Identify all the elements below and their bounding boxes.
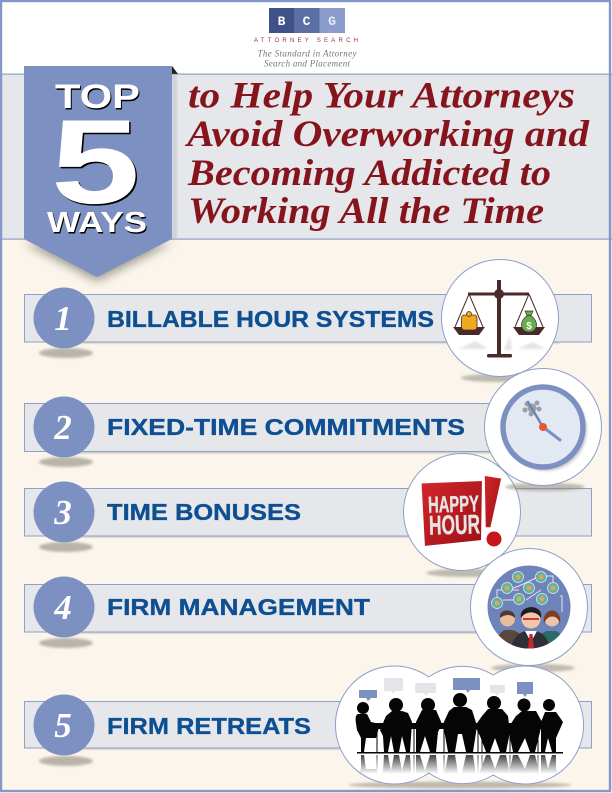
table floor line: [357, 752, 563, 754]
ribbon: Top 5 Ways: WAYS: [47, 207, 147, 239]
icon: scales with clock and money bag: [442, 260, 558, 382]
item 2: Fixed-Time Commitments: 2: [53, 408, 72, 447]
item 2: Fixed-Time Commitments: [24, 396, 592, 467]
ribbon: Top 5 Ways: 5: [51, 95, 140, 229]
title: Becoming Addicted to: [187, 153, 551, 194]
title: to Help Your Attorneys: [188, 76, 575, 116]
logo: [254, 8, 358, 68]
ribbon: Top 5 Ways: 5: [52, 96, 142, 230]
icon: clock: [484, 368, 602, 491]
ribbon: Top 5 Ways: TOP: [55, 78, 140, 116]
header band: [0, 74, 612, 240]
item 3: Time Bonuses: [24, 482, 592, 552]
icon: Happy Hour sign: [404, 454, 520, 577]
item 5: Firm Retreats: [24, 694, 592, 766]
icon: Happy Hour sign: HOUR: [429, 509, 480, 541]
logo: B: [278, 14, 286, 29]
logo: Search and Placement: [264, 58, 350, 68]
item 3: Time Bonuses: 3: [53, 493, 72, 532]
item 4: Firm Management: [24, 576, 592, 648]
item 1: Billable Hour Systems: [24, 288, 592, 358]
logo: C: [303, 14, 311, 29]
logo: The Standard in Attorney: [258, 48, 356, 58]
people: [356, 693, 563, 752]
ribbon: Top 5 Ways: WAYS: [48, 208, 148, 240]
title: [185, 76, 590, 232]
logo: ATTORNEY SEARCH: [254, 38, 358, 44]
item 4: Firm Management: 4: [53, 588, 72, 627]
title: Working All the Time: [188, 191, 544, 232]
item 5: Firm Retreats: 5: [54, 706, 72, 745]
icon: meeting silhouettes: [335, 666, 584, 793]
item 2: Fixed-Time Commitments: FIXED-TIME COMMITMENTS: [107, 414, 465, 440]
item 3: Time Bonuses: TIME BONUSES: [107, 499, 301, 525]
icon: management team: [470, 548, 588, 672]
icon: Happy Hour sign: HAPPY: [428, 490, 479, 518]
reflection: [359, 755, 558, 773]
item 1: Billable Hour Systems: BILLABLE HOUR SYSTEMS: [107, 306, 434, 332]
title: Avoid Overworking and: [185, 114, 590, 155]
item 1: Billable Hour Systems: 1: [54, 299, 72, 338]
speech bubbles: [359, 678, 533, 701]
logo: G: [328, 14, 336, 29]
item 5: Firm Retreats: FIRM RETREATS: [107, 713, 311, 739]
ribbon: Top 5 Ways: [24, 66, 178, 281]
item 4: Firm Management: FIRM MANAGEMENT: [107, 594, 371, 620]
ribbon: Top 5 Ways: TOP: [56, 80, 141, 118]
icon: scales with clock and money bag: $: [526, 321, 532, 332]
